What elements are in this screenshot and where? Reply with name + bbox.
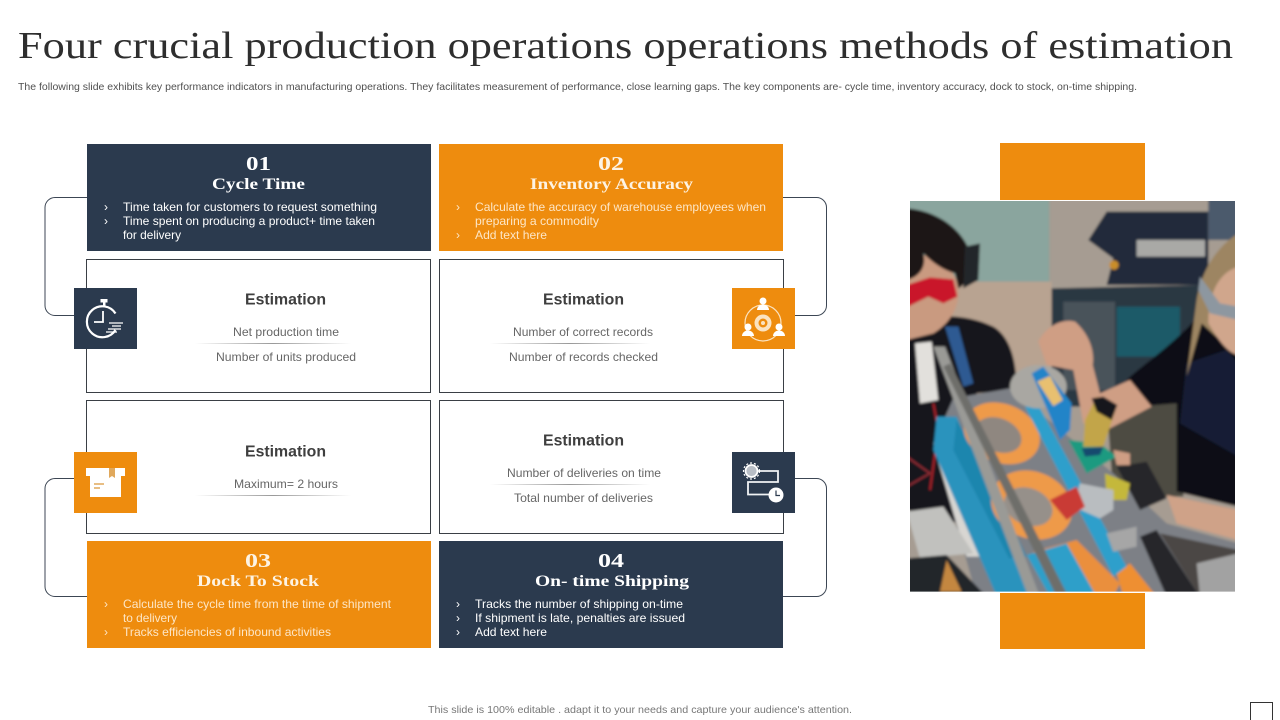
orange block: top of photo bbox=[1000, 143, 1145, 200]
hand and arm bbox=[1038, 321, 1152, 430]
number 04: 04 bbox=[598, 551, 624, 572]
bullet list: cycle time: › bbox=[104, 214, 108, 228]
panel: on-time shipping bbox=[439, 541, 783, 648]
panel: dock to stock bbox=[87, 541, 431, 648]
bullet list: dock to stock: to delivery bbox=[123, 611, 177, 625]
bullet list: inventory accuracy: Add text here bbox=[475, 228, 547, 242]
bullet list: on-time shipping: Add text here bbox=[475, 625, 547, 639]
heading: estimation: Estimation bbox=[543, 432, 624, 450]
bullet list: inventory accuracy: Calculate the accuracy of warehouse employees when bbox=[475, 200, 766, 214]
rails bbox=[933, 347, 1040, 597]
panel: estimation, cycle time bbox=[86, 260, 430, 392]
bullet list: on-time shipping: Tracks the number of shipping on-time bbox=[475, 597, 683, 611]
heading: inventory accuracy: Inventory Accuracy bbox=[530, 176, 693, 193]
left person bbox=[907, 316, 1017, 523]
background printer bbox=[1088, 212, 1208, 285]
numerator: Net production time bbox=[233, 325, 339, 339]
bullet list: cycle time: Time taken for customers to request something bbox=[123, 200, 377, 214]
connector: dock to stock bbox=[45, 478, 87, 596]
orange block: bottom of photo bbox=[1000, 593, 1145, 649]
bullet list: dock to stock: Calculate the cycle time from the time of shipment bbox=[123, 597, 392, 611]
bullet list: cycle time bbox=[104, 200, 377, 242]
bullet list: dock to stock: › bbox=[104, 597, 108, 611]
icon: package box bbox=[74, 452, 137, 513]
icon: scheduled process bbox=[732, 452, 795, 513]
connector: cycle time bbox=[45, 198, 87, 316]
heading: estimation: Estimation bbox=[543, 292, 624, 308]
denominator: Number of units produced bbox=[216, 350, 356, 364]
right person bbox=[1127, 317, 1238, 507]
bullet list: dock to stock bbox=[104, 597, 392, 639]
bullet list: inventory accuracy: › bbox=[456, 200, 460, 214]
sensor arm bbox=[1025, 405, 1127, 577]
connector: inventory accuracy bbox=[783, 197, 826, 316]
panel: inventory accuracy bbox=[439, 144, 783, 251]
bullet list: on-time shipping: › bbox=[456, 611, 460, 625]
formula: Maximum= 2 hours bbox=[234, 477, 338, 491]
panel: estimation, dock to stock bbox=[86, 400, 430, 534]
bullet list: cycle time: › bbox=[104, 200, 108, 214]
subtitle text: The following slide exhibits key performance indicators in manufacturing operations. They facilitates measurement of performance, close learning gaps. The key components are- cycle time, inventory accuracy, dock to stock, on-time shipping. bbox=[18, 81, 1137, 93]
bullet list: inventory accuracy: preparing a commodity bbox=[475, 214, 599, 228]
numerator: Number of correct records bbox=[513, 325, 653, 339]
bullet list: on-time shipping: › bbox=[456, 625, 460, 639]
cabinet bbox=[1052, 285, 1200, 407]
heading: cycle time: Cycle Time bbox=[212, 176, 305, 193]
icon: target with people bbox=[732, 288, 795, 349]
denominator: Number of records checked bbox=[509, 350, 658, 364]
orange rings bbox=[962, 400, 1042, 466]
bullet list: cycle time: Time spent on producing a product+ time taken bbox=[123, 214, 375, 228]
bullet list: inventory accuracy: › bbox=[456, 228, 460, 242]
connector: on-time shipping bbox=[783, 478, 826, 597]
bullet list: inventory accuracy bbox=[456, 200, 766, 242]
numerator: Number of deliveries on time bbox=[507, 466, 661, 480]
photo: two engineers assembling a machine bbox=[907, 197, 1240, 597]
bullet list: on-time shipping: › bbox=[456, 597, 460, 611]
machine base bbox=[933, 388, 1238, 597]
heading: dock to stock: Dock To Stock bbox=[197, 573, 319, 590]
bullet list: on-time shipping bbox=[456, 597, 685, 639]
title: Four crucial production operations operations methods of estimation bbox=[18, 25, 1233, 67]
bullet list: cycle time: for delivery bbox=[123, 228, 181, 242]
footer note: This slide is 100% editable . adapt it to your needs and capture your audience's attention. bbox=[428, 704, 852, 716]
bullet list: on-time shipping: If shipment is late, penalties are issued bbox=[475, 611, 685, 625]
panel: cycle time bbox=[87, 144, 431, 251]
bullet list: dock to stock: › bbox=[104, 625, 108, 639]
heading: on-time shipping: On- time Shipping bbox=[535, 573, 689, 590]
panel: estimation, on-time shipping bbox=[440, 400, 784, 534]
heading: estimation: Estimation bbox=[245, 444, 326, 460]
corner mark bbox=[1250, 702, 1272, 720]
number 02: 02 bbox=[598, 154, 624, 175]
denominator: Total number of deliveries bbox=[514, 491, 653, 505]
number 03: 03 bbox=[245, 551, 271, 572]
icon: stopwatch bbox=[74, 288, 137, 349]
bullet list: dock to stock: Tracks efficiencies of inbound activities bbox=[123, 625, 331, 639]
number 01: 01 bbox=[246, 154, 271, 175]
panel: estimation, inventory accuracy bbox=[440, 260, 784, 392]
heading: estimation: Estimation bbox=[245, 292, 326, 308]
